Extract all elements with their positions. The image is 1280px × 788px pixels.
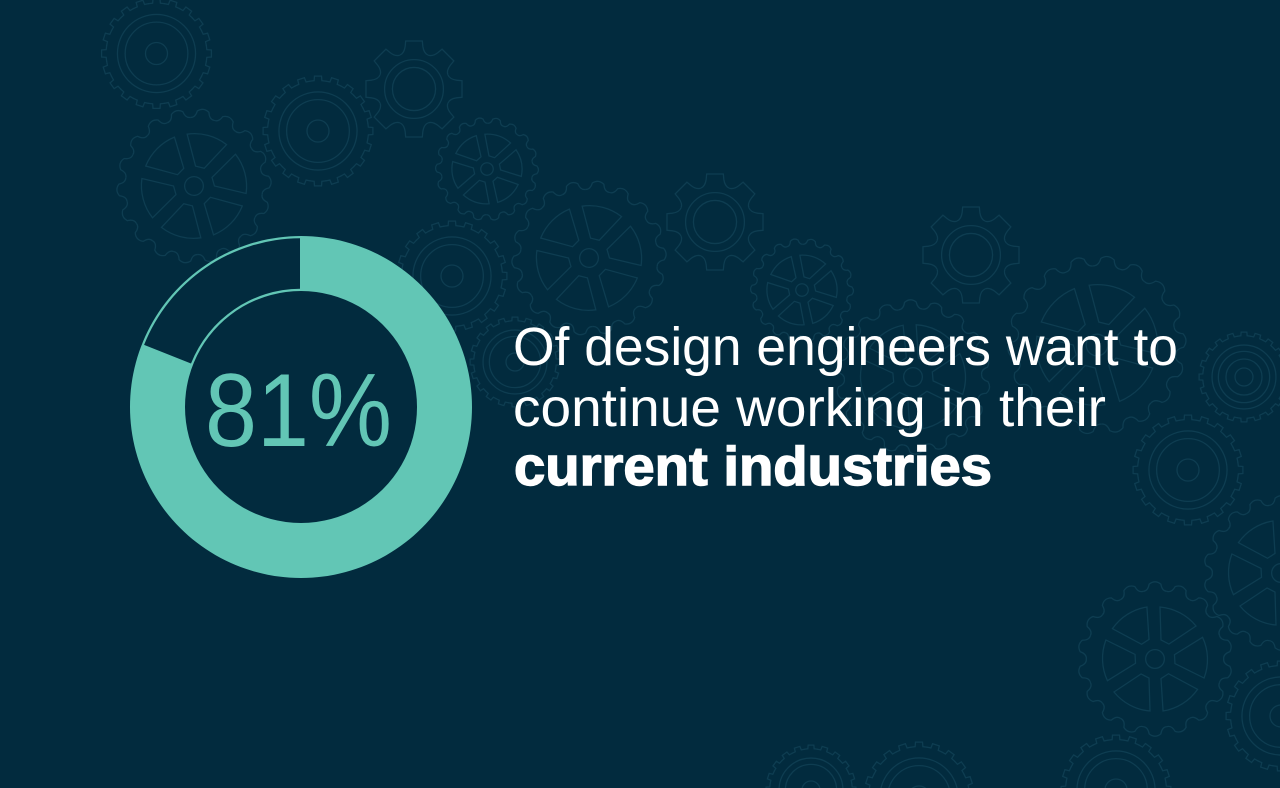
statement line 1: Of design engineers want to: [513, 317, 1178, 377]
statement line 3, emphasised: current industries: [514, 435, 992, 497]
statement line 2: continue working in their: [513, 378, 1106, 438]
donut chart: 81%: [130, 236, 472, 578]
donut value label: 81%: [205, 353, 392, 469]
donut ring: [130, 236, 472, 578]
statement text: [513, 317, 1178, 497]
donut remaining 19% segment: [144, 238, 300, 364]
